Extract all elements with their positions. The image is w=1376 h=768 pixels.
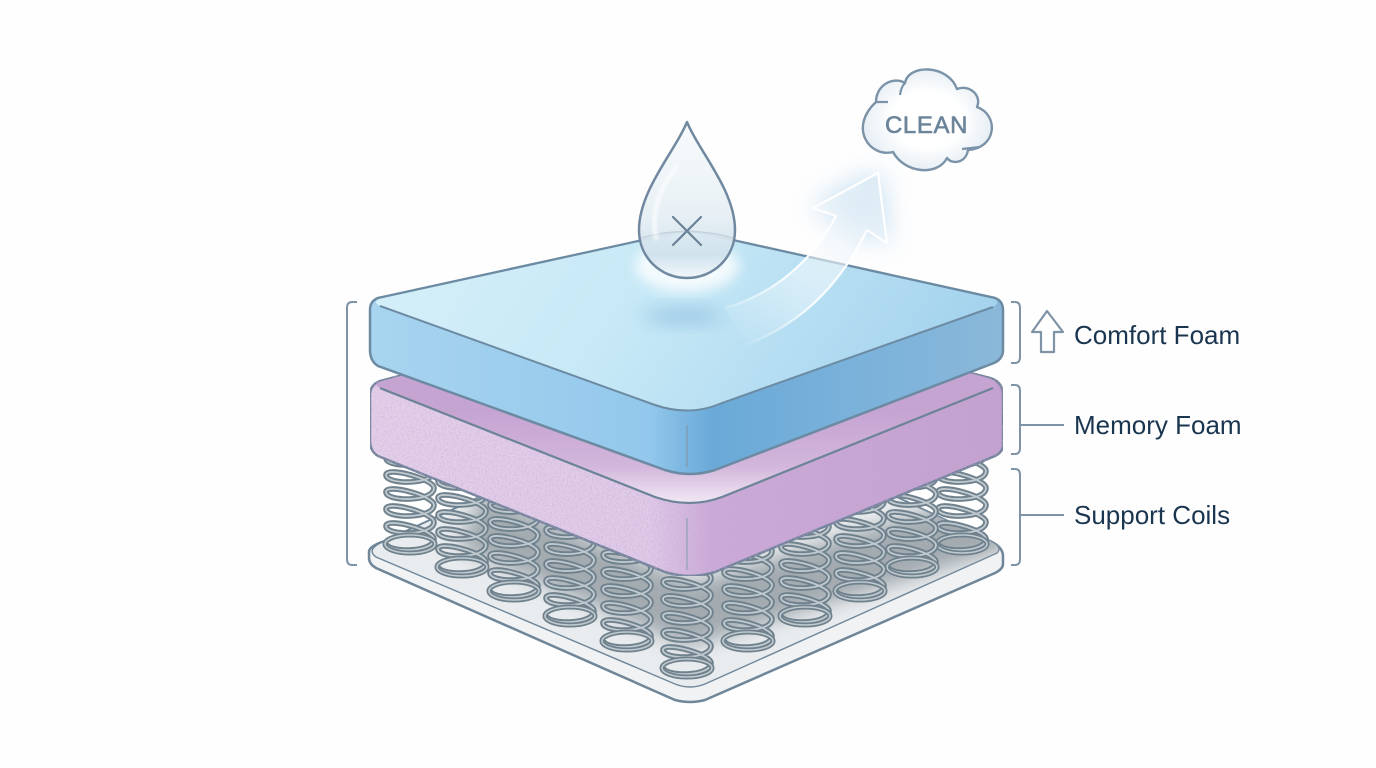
glow around the drop	[635, 240, 739, 292]
arrow: moisture wicking up and away	[725, 173, 887, 345]
label: Memory Foam: Memory Foam	[1074, 410, 1242, 440]
left bracket: whole mattress	[347, 302, 357, 565]
label: Comfort Foam: Comfort Foam	[1074, 320, 1240, 350]
bracket with leader: memory foam	[1011, 385, 1064, 454]
icon: water drop with X	[639, 122, 735, 278]
cloud labelled CLEAN	[863, 69, 992, 170]
cloud labelled CLEAN: CLEAN	[885, 112, 968, 139]
bracket with leader: support coils	[1011, 469, 1064, 565]
support base board	[368, 497, 1004, 704]
label: Support Coils: Support Coils	[1074, 500, 1230, 530]
icon: up arrow	[1032, 311, 1063, 352]
drop shadow on the foam	[642, 310, 722, 322]
bracket: comfort foam	[1011, 302, 1020, 363]
support coils	[385, 438, 987, 677]
comfort foam layer	[370, 231, 1003, 474]
memory foam layer	[370, 300, 1003, 576]
